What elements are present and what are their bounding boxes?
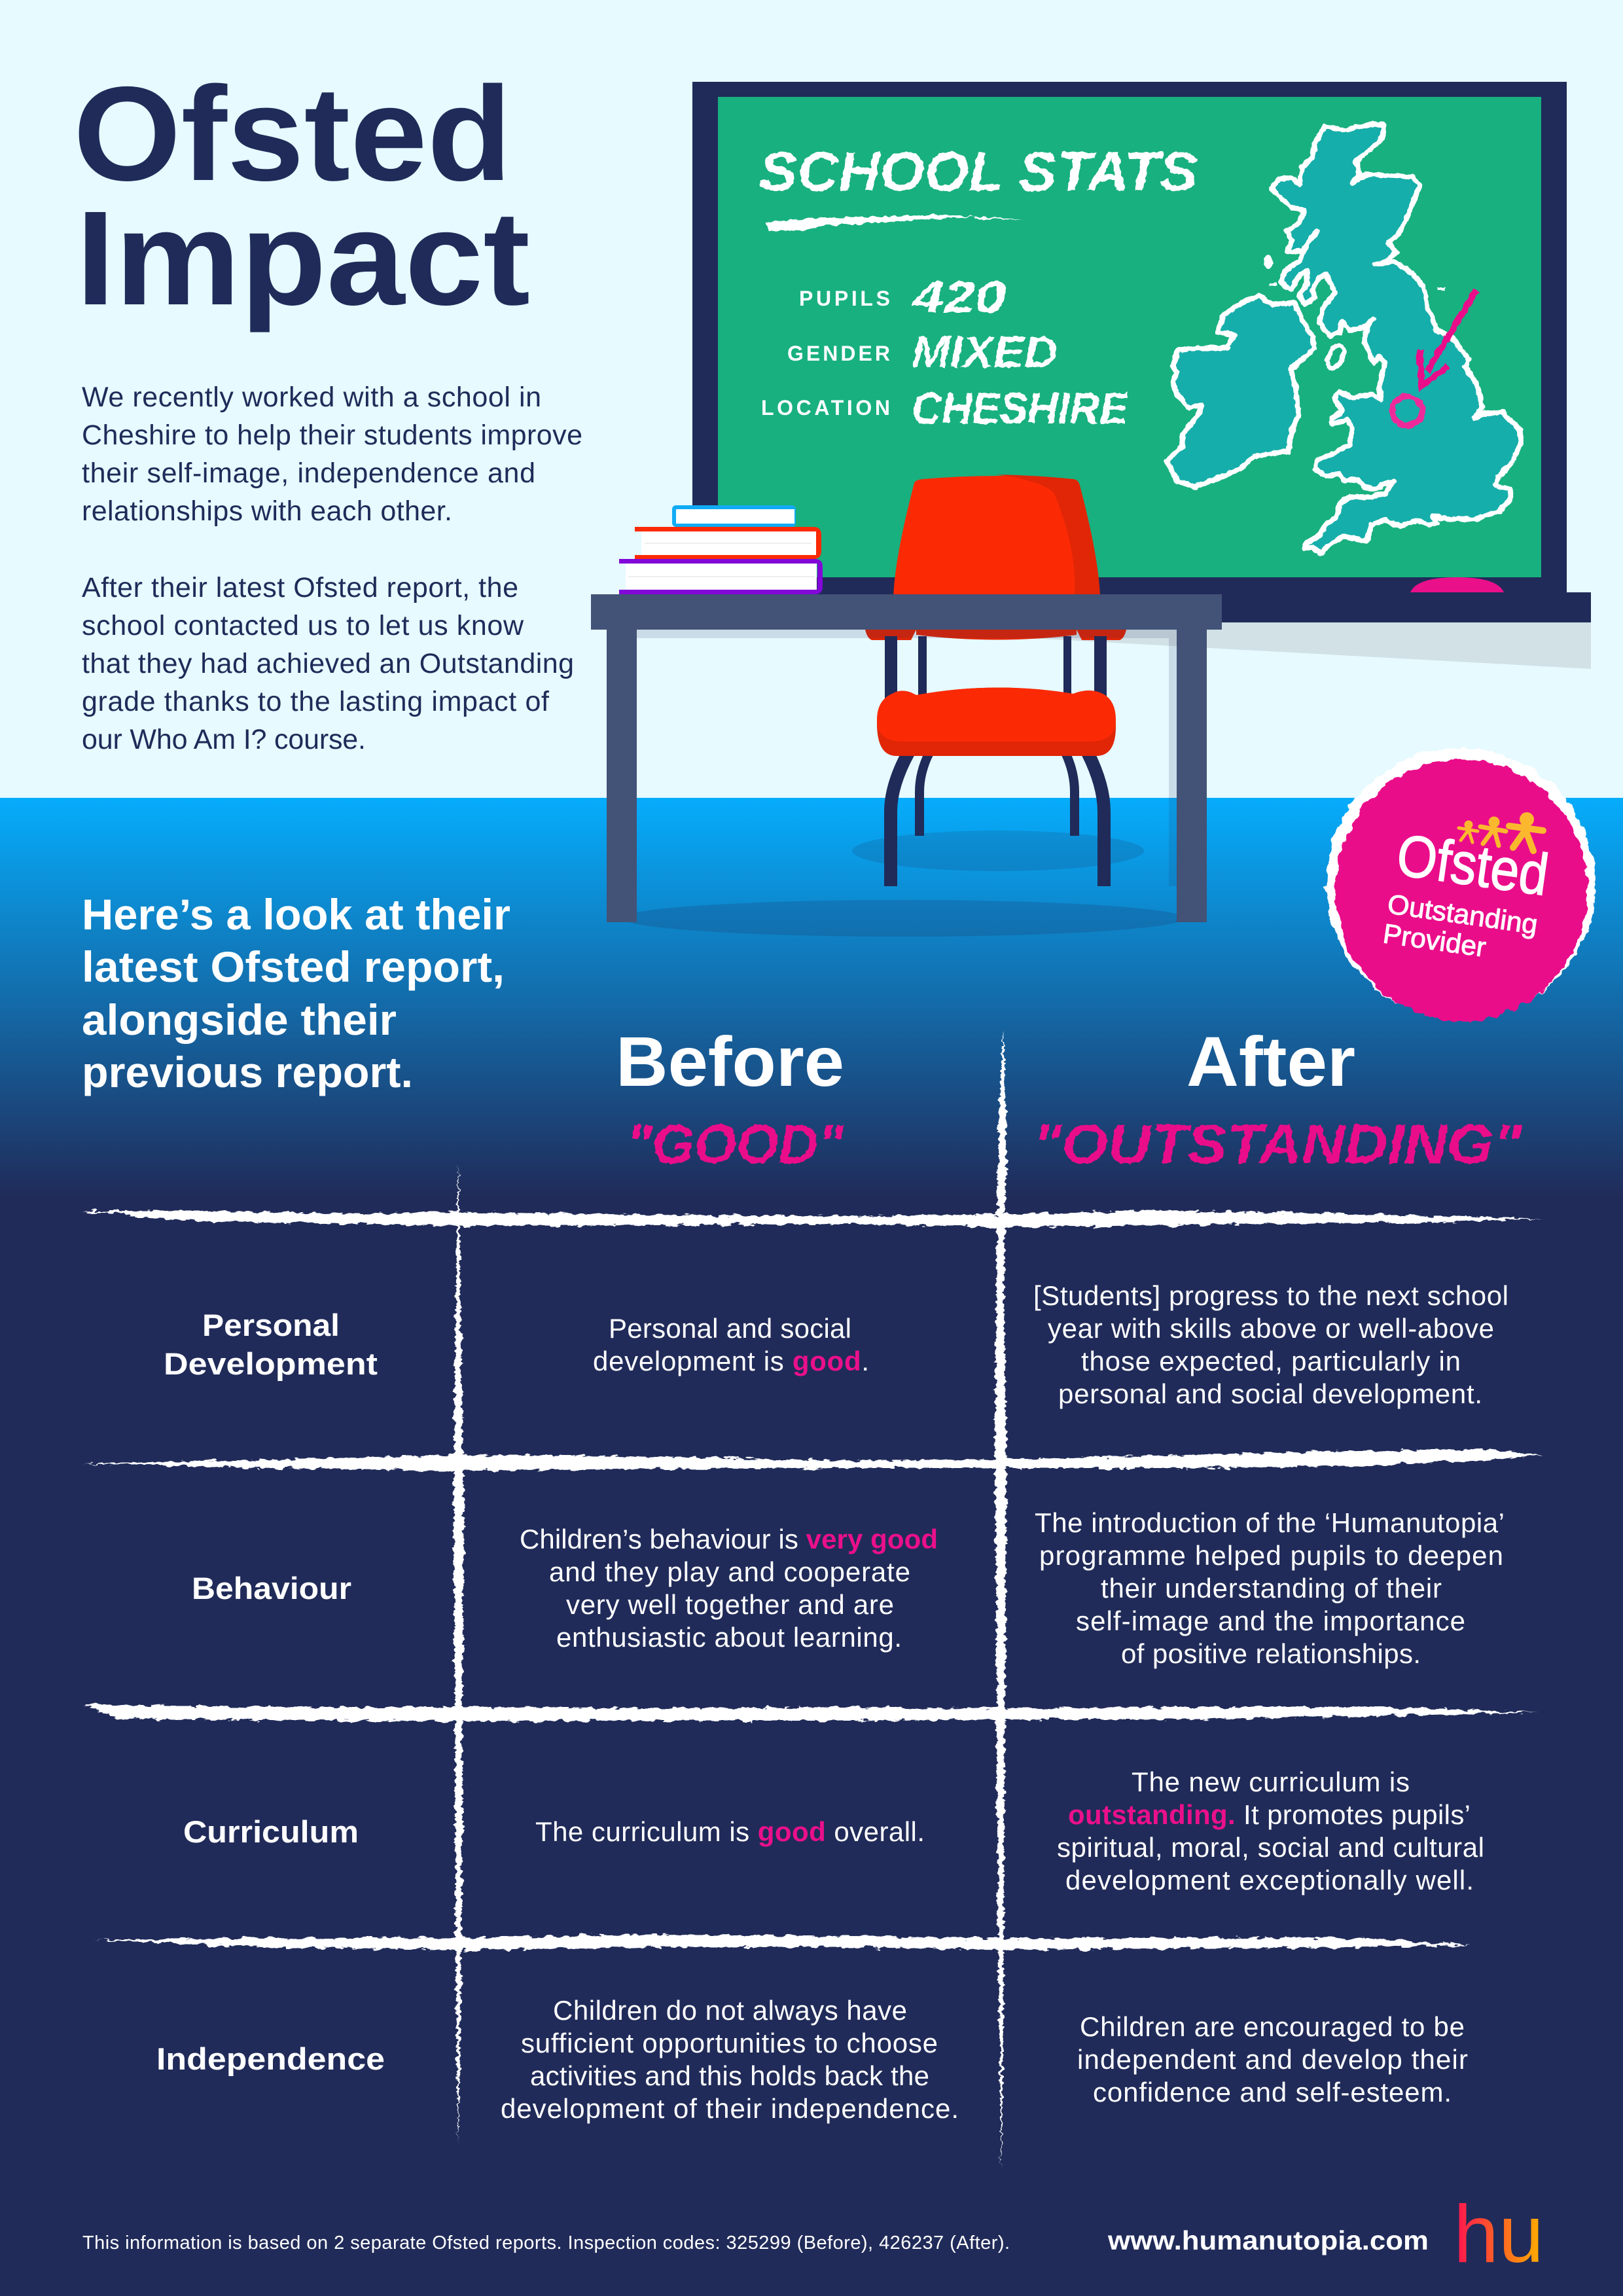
column heading: before: "GOOD" bbox=[626, 1113, 844, 1175]
column heading: after: "OUTSTANDING" bbox=[1033, 1113, 1522, 1175]
Ireland bbox=[1167, 295, 1315, 487]
logo: hu: hu bbox=[1454, 2189, 1544, 2280]
chair rear legs bbox=[919, 753, 1075, 836]
after: personal development: those expected, particularly in bbox=[1081, 1346, 1461, 1376]
before: personal development: development is good. bbox=[593, 1346, 869, 1376]
after: independence bbox=[1077, 2011, 1468, 2108]
before: behaviour bbox=[520, 1524, 938, 1653]
desk left leg bbox=[607, 630, 637, 922]
row: independence: Independence bbox=[156, 2041, 385, 2076]
chalk underline bbox=[766, 215, 1026, 232]
intro paragraph 1: relationships with each other. bbox=[82, 495, 452, 527]
after: curriculum: outstanding. It promotes pupils’ bbox=[1068, 1799, 1471, 1830]
title bbox=[73, 59, 530, 333]
desk right leg bbox=[1177, 630, 1207, 922]
subheading: latest Ofsted report, bbox=[82, 942, 505, 991]
intro paragraph 1: Cheshire to help their students improve bbox=[82, 420, 582, 451]
outstanding provider text bbox=[1382, 888, 1540, 963]
intro paragraph 1 bbox=[82, 382, 582, 527]
after: independence: Children are encouraged to be bbox=[1080, 2011, 1465, 2042]
after: behaviour: their understanding of their bbox=[1101, 1573, 1442, 1604]
icon: Ofsted figures bbox=[1459, 816, 1543, 851]
after: curriculum: The new curriculum is bbox=[1132, 1767, 1410, 1797]
badge white edge bbox=[1326, 748, 1596, 1019]
outstanding provider text: Outstanding bbox=[1385, 888, 1540, 940]
chalk tray bbox=[785, 592, 1591, 622]
row: independence bbox=[156, 1995, 1468, 2124]
subheading: alongside their bbox=[82, 996, 397, 1044]
before: independence: activities and this holds back the bbox=[530, 2060, 929, 2091]
background: blue gradient floor bbox=[0, 798, 1623, 2296]
row: personal development: Personal bbox=[202, 1308, 340, 1342]
footer source note: This information is based on 2 separate Ofsted reports. Inspection codes: 325299 (Before), 426237 (After). bbox=[82, 2233, 1010, 2253]
after: personal development: year with skills above or well-above bbox=[1048, 1313, 1494, 1344]
subheading bbox=[82, 890, 510, 1096]
badge pink disc bbox=[1335, 759, 1588, 1021]
before: behaviour: enthusiastic about learning. bbox=[556, 1622, 902, 1653]
after: behaviour bbox=[1035, 1507, 1505, 1669]
after: curriculum bbox=[1057, 1767, 1484, 1895]
intro paragraph 2: grade thanks to the lasting impact of bbox=[82, 686, 550, 717]
row: behaviour bbox=[192, 1507, 1505, 1669]
chair seat top bbox=[877, 687, 1116, 742]
chair floor shadow bbox=[852, 831, 1144, 871]
subheading: previous report. bbox=[82, 1048, 413, 1096]
after: personal development: [Students] progress to the next school bbox=[1033, 1280, 1508, 1311]
Ofsted wordmark: Ofsted bbox=[1393, 823, 1552, 908]
Hebrides island bbox=[1264, 255, 1273, 269]
blackboard bbox=[692, 82, 1591, 669]
after: independence: confidence and self-esteem. bbox=[1093, 2077, 1452, 2108]
desk under-shadow bbox=[637, 630, 1177, 638]
stats list: LOCATION bbox=[761, 396, 890, 420]
desk bbox=[591, 594, 1222, 922]
intro paragraph 2: that they had achieved an Outstanding bbox=[82, 648, 574, 679]
map of Great Britain and Ireland bbox=[1167, 124, 1521, 554]
pink location ring bbox=[1392, 397, 1422, 425]
footer website: www.humanutopia.com bbox=[1107, 2225, 1429, 2255]
row: curriculum: Curriculum bbox=[183, 1814, 359, 1849]
Great Britain bbox=[1272, 124, 1521, 554]
chair back lower section bbox=[865, 630, 1126, 640]
pink arrow on map bbox=[1420, 290, 1476, 386]
chair back bbox=[893, 476, 1100, 602]
before: behaviour: Children’s behaviour is very good bbox=[520, 1524, 938, 1554]
before: behaviour: and they play and cooperate bbox=[549, 1556, 910, 1587]
desk floor shadow bbox=[622, 900, 1185, 937]
after: personal development: personal and social development. bbox=[1058, 1378, 1482, 1409]
row: behaviour: Behaviour bbox=[192, 1571, 351, 1605]
after: behaviour: self-image and the importance bbox=[1076, 1605, 1465, 1636]
before: independence: development of their independence. bbox=[501, 2093, 959, 2124]
title: Impact bbox=[76, 183, 530, 333]
chair front legs bbox=[891, 753, 1104, 886]
column heading: after bbox=[1033, 1022, 1522, 1175]
stats list bbox=[761, 272, 1129, 433]
wall shadow below tray bbox=[818, 622, 1591, 669]
chair bbox=[865, 475, 1126, 886]
intro paragraph 2: After their latest Ofsted report, the bbox=[82, 572, 518, 603]
before: independence: sufficient opportunities to choose bbox=[521, 2028, 938, 2058]
intro paragraph 1: their self-image, independence and bbox=[82, 457, 535, 489]
intro paragraph 2: school contacted us to let us know bbox=[82, 610, 524, 641]
chair back rods bbox=[885, 636, 1107, 698]
before: curriculum: The curriculum is good overall. bbox=[535, 1816, 925, 1847]
desk top bbox=[591, 594, 1222, 630]
row: personal development: Development bbox=[164, 1346, 378, 1381]
outstanding provider text: Provider bbox=[1382, 918, 1488, 963]
after: behaviour: of positive relationships. bbox=[1121, 1638, 1421, 1669]
purple book bbox=[619, 559, 823, 594]
after: curriculum: development exceptionally well. bbox=[1065, 1865, 1474, 1895]
row: curriculum bbox=[183, 1767, 1484, 1895]
row: personal development bbox=[164, 1280, 1508, 1409]
title: Ofsted bbox=[73, 59, 512, 209]
after: personal development bbox=[1033, 1280, 1508, 1409]
stats list: MIXED bbox=[912, 327, 1058, 377]
intro paragraph 2: our Who Am I? course. bbox=[82, 724, 366, 755]
before: independence bbox=[501, 1995, 959, 2124]
before: behaviour: very well together and are bbox=[566, 1589, 894, 1620]
board frame bbox=[692, 82, 1567, 599]
column heading: before: Before bbox=[616, 1022, 844, 1101]
stats list: PUPILS bbox=[799, 287, 890, 310]
after: independence: independent and develop their bbox=[1077, 2044, 1468, 2075]
Isle of Man bbox=[1325, 343, 1347, 370]
before: personal development bbox=[593, 1313, 869, 1376]
stats list: 420 bbox=[911, 272, 1006, 322]
chair back shading bbox=[996, 475, 1100, 602]
background: pale wall bbox=[0, 0, 1623, 798]
eraser bbox=[1410, 577, 1504, 592]
stats list: CHESHIRE bbox=[912, 384, 1129, 433]
after: curriculum: spiritual, moral, social and cultural bbox=[1057, 1832, 1484, 1863]
small island specks bbox=[1270, 283, 1445, 290]
chair seat bbox=[877, 687, 1116, 756]
subheading: Here’s a look at their bbox=[82, 890, 510, 939]
green board surface bbox=[718, 97, 1541, 577]
desk leg shadow bbox=[1169, 638, 1177, 886]
blue book bbox=[672, 505, 796, 527]
Ofsted outstanding provider badge bbox=[1326, 748, 1596, 1021]
column heading: after: After bbox=[1186, 1022, 1355, 1101]
table grid chalk lines bbox=[82, 1029, 1543, 2170]
before: independence: Children do not always have bbox=[553, 1995, 907, 2026]
after: behaviour: The introduction of the ‘Humanutopia’ bbox=[1035, 1507, 1505, 1538]
after: behaviour: programme helped pupils to deepen bbox=[1039, 1540, 1503, 1571]
stats list: GENDER bbox=[787, 342, 890, 365]
intro paragraph 2 bbox=[82, 572, 574, 755]
column heading: before bbox=[616, 1022, 844, 1175]
red book bbox=[635, 527, 821, 559]
chalk heading: school stats: SCHOOL STATS bbox=[759, 141, 1198, 202]
intro paragraph 1: We recently worked with a school in bbox=[82, 382, 541, 413]
stack of books bbox=[619, 505, 823, 594]
before: personal development: Personal and social bbox=[609, 1313, 851, 1344]
